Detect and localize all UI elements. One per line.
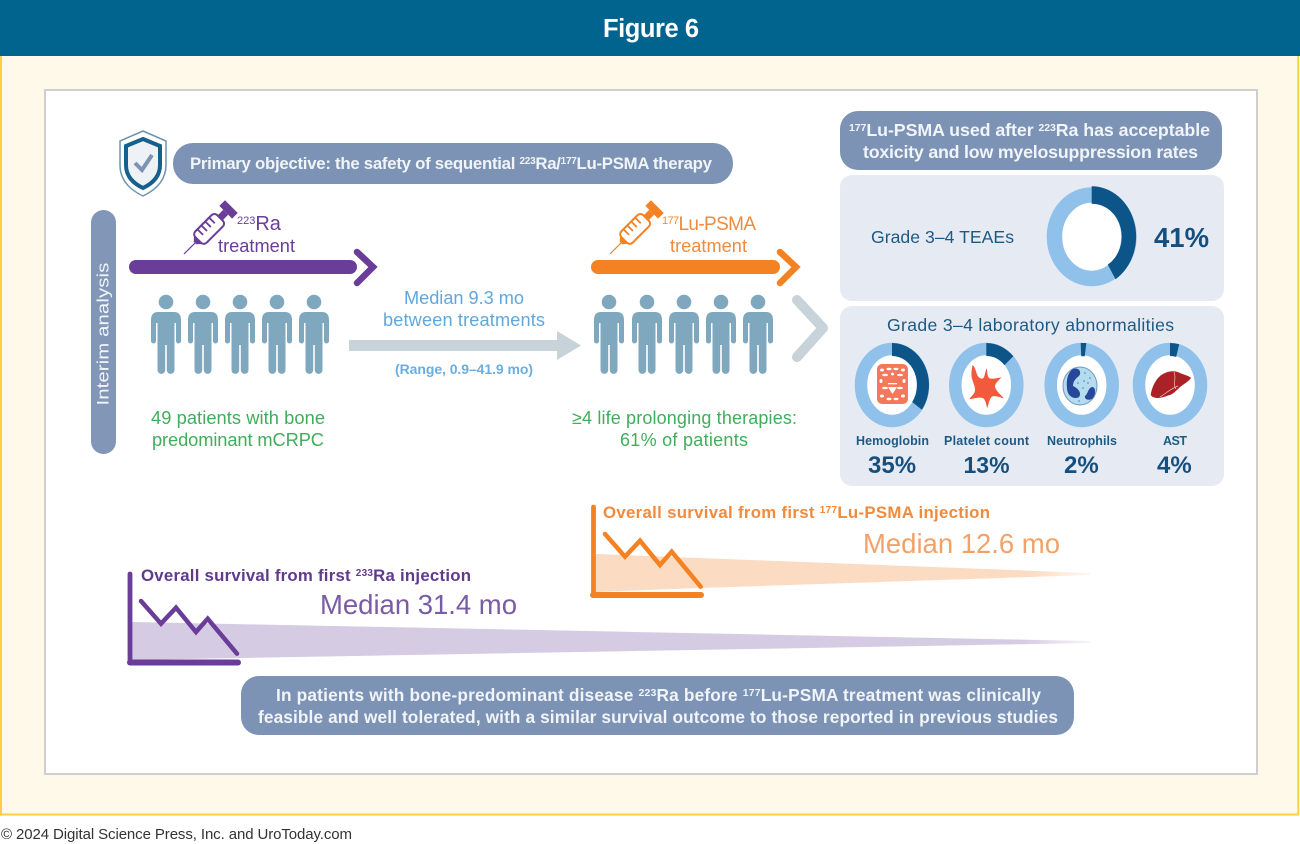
survival chart: 223Ra: Overall survival from first: [141, 566, 351, 585]
icon: red blood cell cluster: [877, 364, 908, 404]
lab labels: Platelet count: [944, 434, 1030, 448]
177Lu-PSMA treatment label: [662, 214, 756, 256]
223Ra treatment label: [218, 213, 295, 256]
patient count text: 49 patients with bone: [151, 407, 325, 428]
survival chart: 177Lu-PSMA: Overall survival from first: [603, 503, 814, 522]
icon: liver: [1151, 371, 1191, 398]
conclusion pill: bottom: In patients with bone-predominant disease: [276, 685, 633, 705]
survival chart: 223Ra: 233: [356, 568, 373, 579]
survival chart: 177Lu-PSMA: [593, 503, 1090, 595]
conclusion pill: bottom: Ra before: [656, 685, 743, 705]
icon: platelet: [969, 365, 1004, 408]
patient count text: [151, 407, 325, 450]
223Ra treatment label: 223: [237, 215, 255, 227]
primary objective pill: Lu-PSMA therapy: [577, 154, 713, 173]
lab labels: Hemoglobin: [856, 434, 929, 448]
primary objective pill: Ra/: [535, 154, 561, 173]
lab labels: AST: [1163, 434, 1187, 448]
panel: TEAEs: [840, 175, 1224, 301]
conclusion pill: toxicity: Lu-PSMA used after: [866, 120, 1039, 140]
primary objective pill: 223: [520, 156, 536, 167]
grey arrow between treatments: [349, 331, 581, 360]
conclusion pill: toxicity: Ra has acceptable: [1056, 120, 1210, 140]
lab percentages: [868, 452, 1192, 479]
223Ra treatment label: treatment: [218, 236, 295, 256]
177Lu-PSMA treatment label: Lu-PSMA: [678, 214, 756, 235]
survival chart: 223Ra: Median 31.4 mo: [320, 589, 517, 620]
interim analysis pill: Interim analysis: [93, 263, 112, 406]
white figure panel: [45, 90, 1257, 774]
survival chart: 177Lu-PSMA: 177: [820, 505, 837, 516]
donut: platelet count: [955, 343, 1017, 421]
range text: (Range, 0.9–41.9 mo): [395, 361, 533, 377]
figure content: [91, 111, 1224, 735]
conclusion pill: toxicity: 223: [1038, 122, 1056, 134]
copyright footer: © 2024 Digital Science Press, Inc. and UroToday.com: [1, 826, 352, 843]
TEAEs percentage: 41%: [1154, 222, 1209, 253]
conclusion pill: bottom: 177: [743, 687, 761, 699]
conclusion pill: bottom: feasible and well tolerated, with a similar survival outcome to those reported in previous studies: [258, 707, 1058, 727]
177Lu-PSMA treatment label: treatment: [670, 236, 747, 256]
conclusion pill: toxicity: 177: [849, 122, 867, 134]
orange treatment arrow: [591, 252, 796, 283]
icon: shield with check: [120, 131, 166, 196]
panel: laboratory abnormalities: [840, 306, 1224, 486]
lab labels: Neutrophils: [1047, 434, 1117, 448]
people group: 177Lu-PSMA: [594, 295, 773, 374]
median between treatments text: between treatments: [383, 310, 545, 330]
people group: 223Ra: [151, 295, 329, 374]
grey chevron: [797, 300, 823, 357]
lab percentages: 35%: [868, 452, 916, 479]
conclusion pill: bottom: [241, 676, 1074, 735]
lab percentages: 13%: [964, 452, 1010, 478]
lab panel heading: Grade 3–4 laboratory abnormalities: [887, 315, 1174, 335]
patient count text: predominant mCRPC: [152, 429, 324, 450]
conclusion pill: bottom: Lu-PSMA treatment was clinically: [761, 685, 1041, 705]
prior therapies text: 61% of patients: [620, 430, 748, 450]
donut: 41%: [1054, 186, 1136, 279]
TEAEs label: Grade 3–4 TEAEs: [871, 227, 1014, 247]
survival chart: 177Lu-PSMA: Median 12.6 mo: [863, 528, 1060, 559]
primary objective pill: [173, 143, 733, 184]
donut: hemoglobin: [861, 343, 929, 421]
conclusion pill: toxicity: [840, 111, 1222, 170]
primary objective pill: Primary objective: the safety of sequential: [190, 154, 515, 173]
title: Figure 6: [603, 15, 699, 43]
survival chart: 223Ra: [130, 566, 1090, 662]
donut: neutrophils: [1051, 343, 1113, 421]
icon: orange syringe: [604, 200, 664, 260]
conclusion pill: bottom: 223: [638, 687, 656, 699]
header bar: [0, 0, 1300, 56]
survival chart: 223Ra: Ra injection: [373, 566, 471, 585]
prior therapies text: ≥4 life prolonging therapies:: [572, 408, 797, 428]
median between treatments text: [383, 288, 545, 330]
donut: AST: [1139, 343, 1201, 421]
interim analysis pill: [91, 210, 116, 454]
median between treatments text: Median 9.3 mo: [404, 288, 524, 308]
icon: neutrophil: [1063, 367, 1097, 405]
icon: purple syringe: [178, 200, 238, 260]
lab percentages: 4%: [1157, 452, 1192, 479]
lab labels: [856, 434, 1187, 448]
223Ra treatment label: Ra: [255, 213, 282, 235]
177Lu-PSMA treatment label: 177: [662, 215, 679, 227]
prior therapies text: [572, 408, 797, 450]
purple treatment arrow: [129, 252, 373, 283]
lab percentages: 2%: [1064, 452, 1099, 479]
conclusion pill: toxicity: toxicity and low myelosuppression rates: [863, 142, 1198, 162]
primary objective pill: 177: [561, 156, 577, 167]
survival chart: 177Lu-PSMA: Lu-PSMA injection: [837, 503, 990, 522]
